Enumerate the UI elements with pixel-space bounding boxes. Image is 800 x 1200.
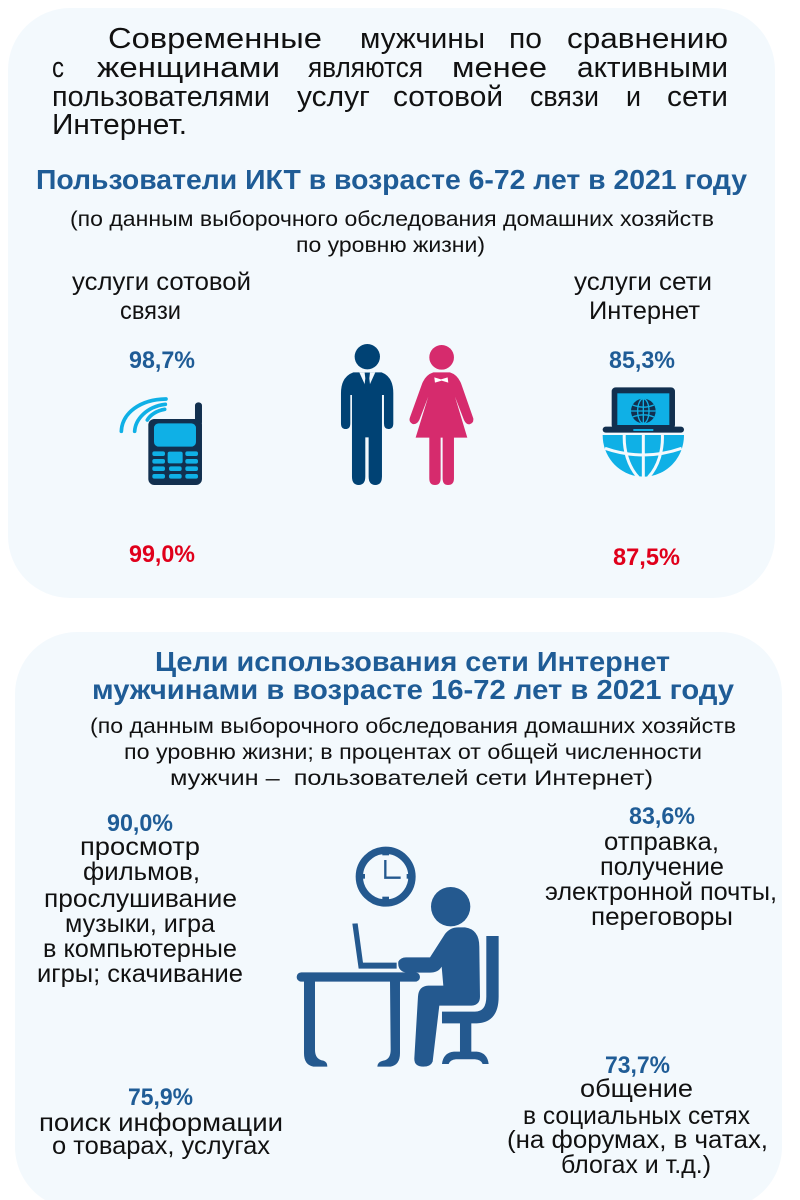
intro paragraph: и bbox=[626, 81, 641, 113]
value: women internet: 87,5% bbox=[613, 544, 680, 571]
icon: clock bbox=[359, 850, 412, 903]
stat: social networks: общение bbox=[580, 1075, 693, 1103]
heading: internet use goals: мужчинами в возрасте 16-72 лет в 2021 году bbox=[92, 674, 734, 705]
icon: woman bbox=[410, 345, 473, 485]
subheading: source and base: мужчин – пользователей сети Интернет) bbox=[170, 766, 653, 790]
label: internet services: услуги сети bbox=[574, 268, 712, 296]
intro paragraph bbox=[52, 23, 728, 141]
label: mobile services bbox=[72, 268, 251, 325]
subheading: source and base: (по данным выборочного обследования домашних хозяйств bbox=[90, 714, 736, 738]
intro paragraph: являются bbox=[308, 52, 423, 84]
stat: films and music: 90,0% bbox=[107, 810, 173, 837]
heading: ICT users: Пользователи ИКТ в возрасте 6-72 лет в 2021 году bbox=[36, 164, 747, 195]
label: internet services bbox=[574, 268, 712, 325]
heading: internet use goals: Цели использования сети Интернет bbox=[155, 646, 670, 677]
intro paragraph: сети bbox=[667, 81, 728, 113]
stat: films and music: музыки, игра bbox=[65, 910, 215, 938]
stat: films and music: фильмов, bbox=[83, 858, 200, 886]
stat: social networks: (на форумах, в чатах, bbox=[507, 1126, 768, 1154]
stat: product search bbox=[39, 1084, 283, 1160]
stat: email: 83,6% bbox=[629, 803, 695, 830]
intro paragraph: с bbox=[52, 52, 64, 84]
subheading: source: по уровню жизни) bbox=[296, 233, 485, 257]
intro paragraph: сравнению bbox=[567, 23, 728, 55]
stat: films and music: прослушивание bbox=[44, 885, 237, 913]
value: men internet: 85,3% bbox=[609, 347, 675, 374]
stat: product search: поиск информации bbox=[39, 1109, 283, 1137]
intro paragraph: активными bbox=[577, 52, 728, 84]
label: internet services: Интернет bbox=[589, 297, 701, 325]
intro paragraph: Интернет. bbox=[52, 109, 187, 141]
subheading: source and base: по уровню жизни; в процентах от общей численности bbox=[124, 740, 702, 764]
label: mobile services: связи bbox=[120, 297, 181, 325]
intro paragraph: по bbox=[509, 23, 542, 55]
panel: ICT users bbox=[8, 8, 775, 598]
label: mobile services: услуги сотовой bbox=[72, 268, 251, 296]
stat: social networks: 73,7% bbox=[605, 1052, 670, 1079]
stat: email: получение bbox=[600, 853, 724, 881]
stat: films and music bbox=[37, 810, 243, 988]
stat: email: отправка, bbox=[604, 828, 719, 856]
stat: social networks: блогах и т.д.) bbox=[561, 1151, 711, 1179]
stat: product search: 75,9% bbox=[128, 1084, 193, 1111]
intro paragraph: Современные bbox=[108, 23, 322, 55]
subheading: source and base bbox=[90, 714, 736, 790]
stat: films and music: в компьютерные bbox=[43, 935, 237, 963]
value: women mobile: 99,0% bbox=[129, 541, 195, 568]
stat: social networks bbox=[507, 1052, 768, 1179]
value: men mobile: 98,7% bbox=[129, 347, 195, 374]
subheading: source bbox=[70, 207, 714, 257]
intro paragraph: мужчины bbox=[360, 23, 485, 55]
intro paragraph: пользователями bbox=[52, 81, 270, 113]
intro paragraph: услуг bbox=[297, 81, 370, 113]
stat: social networks: в социальных сетях bbox=[523, 1102, 750, 1130]
stat: email: электронной почты, bbox=[545, 878, 777, 906]
stat: product search: о товарах, услугах bbox=[52, 1132, 271, 1160]
stat: films and music: просмотр bbox=[80, 833, 200, 861]
icon: man bbox=[341, 344, 393, 485]
stat: email bbox=[545, 803, 777, 931]
icon: mobile phone bbox=[121, 399, 202, 485]
intro paragraph: связи bbox=[530, 81, 599, 113]
stat: films and music: игры; скачивание bbox=[37, 960, 243, 988]
stat: email: переговоры bbox=[591, 903, 733, 931]
intro paragraph: сотовой bbox=[393, 81, 503, 113]
intro paragraph: менее bbox=[452, 52, 547, 84]
icon: person at laptop with clock bbox=[297, 850, 499, 1067]
icon: laptop with globe bbox=[603, 387, 684, 478]
subheading: source: (по данным выборочного обследования домашних хозяйств bbox=[70, 207, 714, 231]
heading: internet use goals bbox=[92, 646, 734, 705]
panel: internet use goals bbox=[15, 632, 782, 1200]
intro paragraph: женщинами bbox=[97, 52, 280, 84]
